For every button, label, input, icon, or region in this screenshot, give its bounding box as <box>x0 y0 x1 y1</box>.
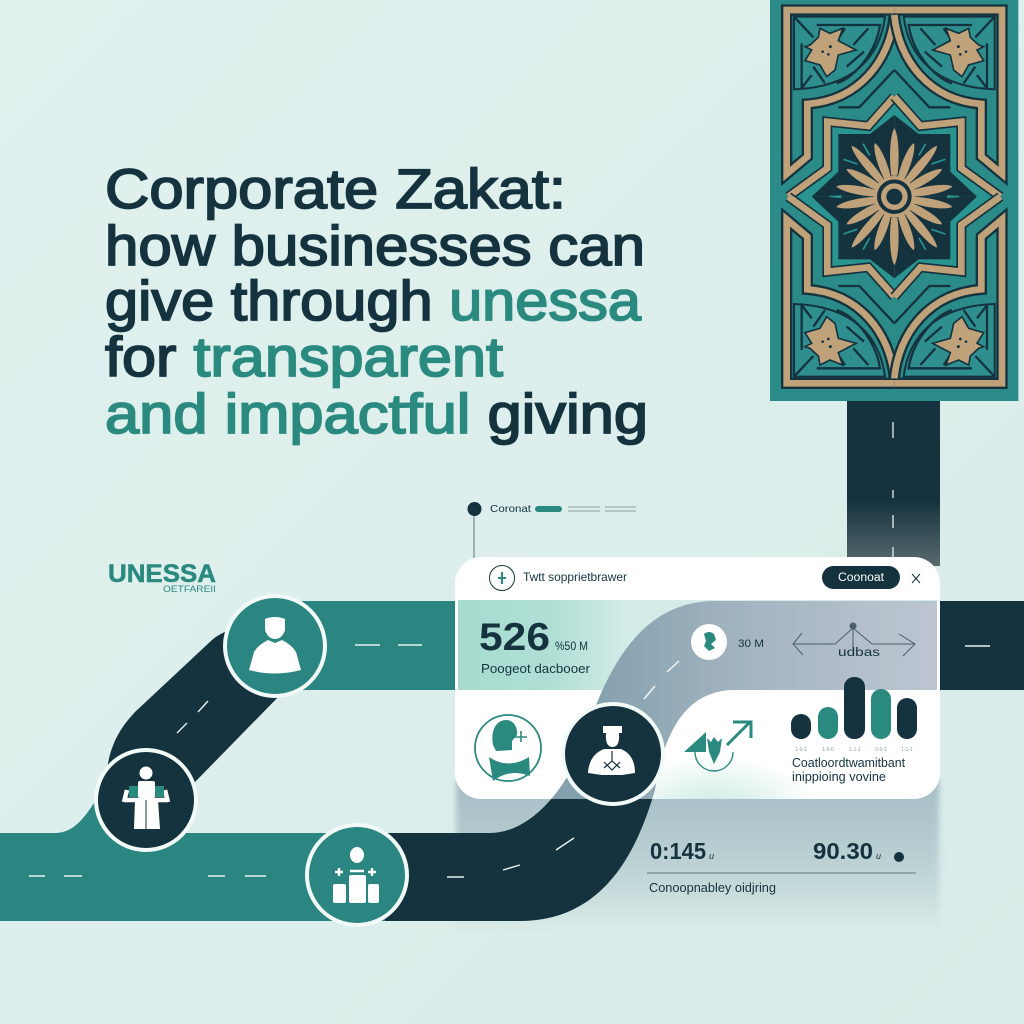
bar chart: 1-1-1 <box>849 747 861 753</box>
road: vertical from panel <box>847 401 940 566</box>
icon: hands and head <box>475 715 541 781</box>
icon: growth arrows <box>684 722 751 771</box>
icon: header badge <box>490 566 514 590</box>
title: give through unessa <box>105 269 642 332</box>
icon: milestone group <box>307 825 407 925</box>
stats: below card: u <box>876 851 881 861</box>
bar chart: 0-0-1 <box>875 747 887 753</box>
stats: below card: 0:145 <box>650 838 706 864</box>
stats: below card: Conoopnabley oidjring <box>649 881 776 895</box>
button: Coonoat <box>838 572 885 584</box>
road: upper teal segment <box>300 601 460 690</box>
stats: below card: 90.30 <box>813 838 873 864</box>
card heading: Twtt sopprietbrawer <box>523 570 627 584</box>
title <box>105 157 648 445</box>
chart caption: Coatloordtwamitbant <box>792 756 906 770</box>
title: and impactful giving <box>105 382 648 445</box>
bar chart: 1-1-1 <box>901 747 913 753</box>
panel: dashboard card <box>455 557 940 799</box>
button <box>822 566 900 589</box>
chart caption: inippioing vovine <box>792 770 886 784</box>
stat: 526: %50 M <box>555 639 588 653</box>
label: 30 M: 30 M <box>738 638 764 650</box>
stats: below card <box>647 838 916 895</box>
road: lower dark curve <box>385 601 940 921</box>
panel: islamic geometric pattern <box>770 0 1018 401</box>
chart caption <box>792 756 906 784</box>
card shadow <box>456 780 939 930</box>
stat: 526: Poogeot dacbooer <box>481 661 591 676</box>
road: right dark segment <box>935 601 1024 690</box>
logo: UNESSA: OETFAREII <box>163 584 216 594</box>
title: how businesses can <box>105 214 645 277</box>
icon: white badge <box>691 624 727 660</box>
stats: below card: u <box>709 851 714 861</box>
bar chart: 1-0-1 <box>795 747 807 753</box>
annotation: top label <box>468 502 636 558</box>
title: for transparent <box>105 325 503 388</box>
diagram: arrow branch <box>793 622 915 659</box>
diagram: arrow branch: udbas <box>838 647 880 659</box>
road: diagonal dark segment <box>107 626 285 782</box>
bar chart: 1-0-0 <box>822 747 834 753</box>
bar chart <box>791 677 917 753</box>
title: Corporate Zakat: <box>105 157 566 220</box>
annotation: top label: Coronat <box>490 503 531 515</box>
stat: 526 <box>479 616 591 676</box>
road: lower teal segment <box>0 800 400 921</box>
logo: UNESSA: UNESSA <box>108 560 216 588</box>
icon: milestone figure with book <box>96 750 196 850</box>
icon: milestone person <box>225 596 325 696</box>
icon: close <box>912 574 920 583</box>
icon: milestone clergy figure <box>563 704 663 804</box>
stat: 526: 526 <box>479 616 550 659</box>
